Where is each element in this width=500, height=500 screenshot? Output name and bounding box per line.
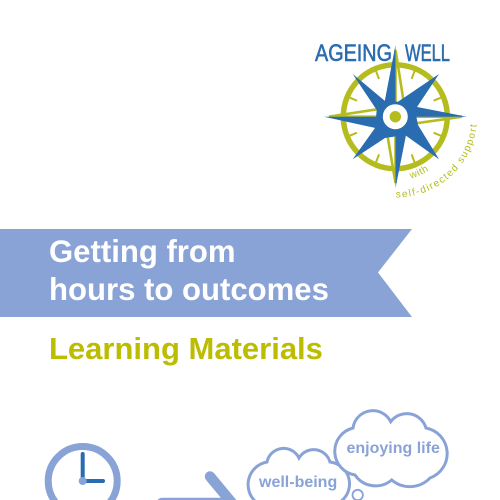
cloud: enjoying life bbox=[335, 411, 447, 487]
compass hub bbox=[383, 104, 408, 129]
subtitle: Learning Materials bbox=[49, 331, 323, 366]
cloud: well-being: well-being bbox=[258, 474, 337, 491]
logo curved text: self-directed support bbox=[396, 124, 477, 198]
logo: Ageing Well compass bbox=[314, 40, 477, 198]
compass ring bbox=[343, 65, 447, 169]
cloud: enjoying life: enjoying life bbox=[346, 440, 440, 457]
arrow bbox=[162, 476, 242, 500]
logo title: AGEING bbox=[315, 40, 392, 67]
logo title bbox=[315, 40, 450, 67]
compass blue points bbox=[324, 45, 467, 188]
banner title: hours to outcomes bbox=[49, 272, 329, 307]
banner title: Getting from bbox=[49, 234, 236, 269]
thought bubble bbox=[352, 490, 363, 500]
banner ribbon bbox=[0, 229, 412, 317]
icon: clock bbox=[48, 446, 117, 500]
compass diagonal star bbox=[353, 74, 439, 159]
cloud: well-being bbox=[248, 448, 350, 500]
compass olive outlined points bbox=[329, 50, 462, 183]
logo title: WELL bbox=[405, 40, 450, 67]
logo curved text: with bbox=[409, 166, 428, 178]
banner title bbox=[49, 234, 329, 307]
